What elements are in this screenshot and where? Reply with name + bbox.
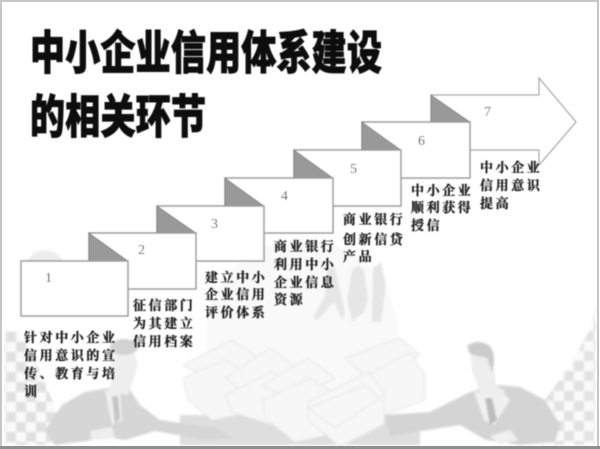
title: 中小企业信用体系建设 — [30, 27, 382, 79]
step 2 description: 征信部门 — [133, 298, 195, 313]
step 3 box: 3 — [211, 217, 218, 232]
step 4 box: 4 — [281, 189, 288, 204]
background illustration: businessmen and documents — [5, 239, 596, 447]
step 5 box — [294, 150, 401, 206]
step 4 description: 企业信息 — [274, 275, 336, 290]
step 5 description: 商业银行 — [343, 212, 405, 227]
step 1 description: 传、教育与培 — [24, 366, 118, 381]
step 4 description: 商业银行 — [274, 239, 336, 254]
step 7 description: 中小企业 — [480, 160, 542, 175]
step 1 description: 训 — [24, 384, 40, 399]
left businessman — [45, 339, 233, 445]
step 7 description: 提高 — [480, 196, 511, 211]
paper stacks — [183, 338, 425, 447]
step 5 fold — [362, 122, 401, 150]
step 2 box — [89, 233, 196, 289]
step 3 description: 建立中小 — [205, 270, 267, 285]
step 2 box: 2 — [138, 243, 145, 258]
step 2 description: 信用档案 — [133, 334, 195, 349]
step 6 box: 6 — [418, 134, 425, 149]
step 5 description — [343, 212, 405, 264]
step 1 box — [21, 261, 128, 316]
step 5 description: 创新信贷 — [343, 232, 405, 247]
step 3 description: 企业信用 — [205, 287, 267, 302]
walking silhouettes — [313, 262, 386, 322]
desk band — [180, 415, 420, 445]
step 1 description — [24, 330, 118, 399]
title: 的相关环节 — [30, 91, 206, 143]
step 4 description: 资源 — [274, 292, 305, 307]
step 1 description: 针对中小企业 — [24, 330, 118, 345]
step 4 fold — [294, 150, 333, 178]
step 3 fold — [225, 178, 264, 206]
step 7 description: 信用意识 — [480, 178, 542, 193]
step 6 description: 顺利获得 — [411, 200, 473, 215]
right checkerboard — [542, 305, 596, 445]
step 4 description — [274, 239, 336, 307]
globe backdrop — [25, 239, 398, 431]
step 3 box — [157, 206, 264, 261]
step 6 box — [362, 122, 470, 178]
step 2 description — [133, 298, 195, 349]
step 2 description: 为其建立 — [133, 316, 195, 332]
step 3 description — [205, 270, 267, 320]
step 6 description: 中小企业 — [411, 183, 473, 198]
bottom frame edge — [0, 446, 600, 449]
step 7 arrow: 7 — [484, 105, 491, 120]
step 6 description — [411, 183, 473, 233]
title — [30, 27, 382, 143]
step 1 description: 信用意识的宣 — [24, 348, 118, 363]
step 5 description: 产品 — [343, 249, 374, 264]
step 1 fold — [89, 233, 128, 261]
step 1 box: 1 — [45, 271, 52, 286]
step 7 description — [480, 160, 542, 211]
step 4 description: 利用中小 — [274, 257, 336, 272]
right businessman — [385, 342, 560, 445]
step 3 description: 评价体系 — [205, 305, 267, 320]
step 5 box: 5 — [350, 162, 357, 177]
step 6 description: 授信 — [411, 218, 442, 233]
step 6 fold — [431, 95, 470, 122]
left checkerboard — [5, 330, 60, 445]
step 7 arrow — [431, 78, 576, 165]
step 2 fold — [157, 206, 196, 233]
step 4 box — [225, 178, 333, 233]
